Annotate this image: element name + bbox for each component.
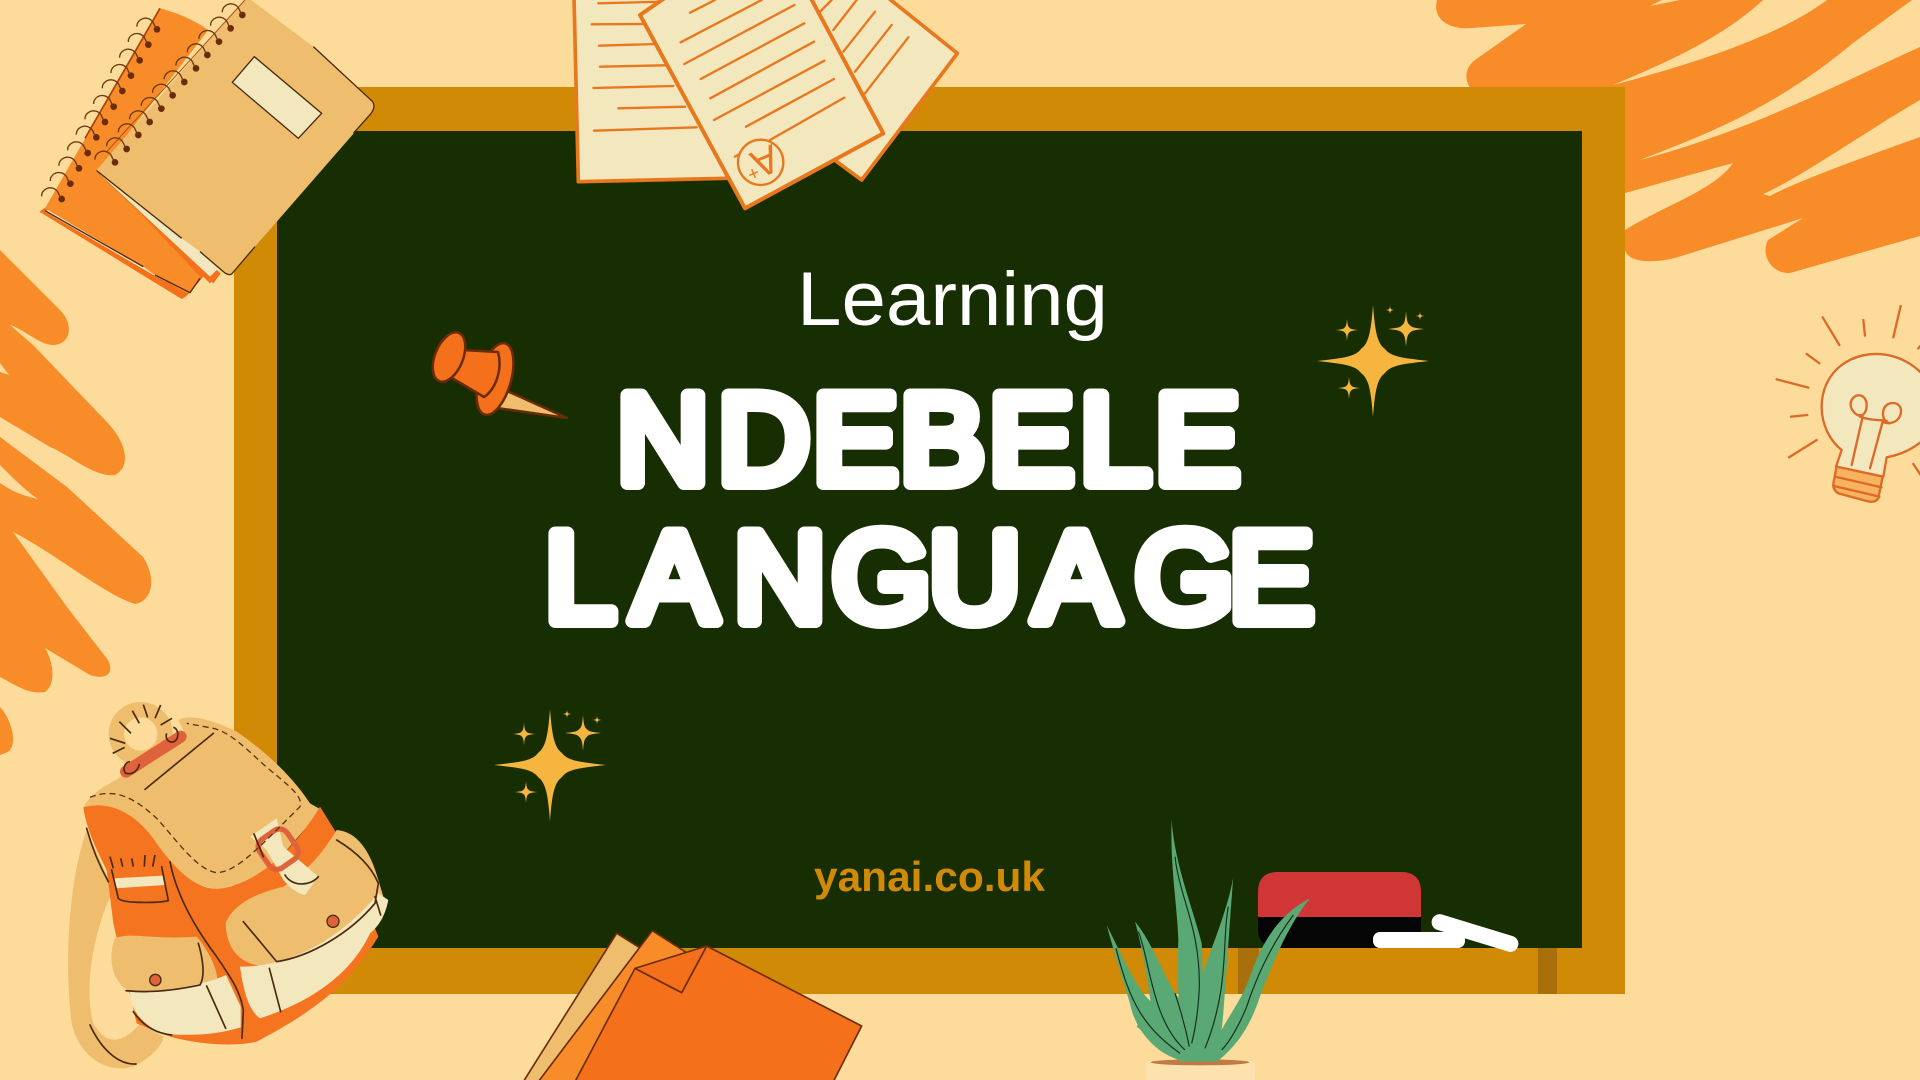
soil: [1151, 1059, 1249, 1065]
title line 1: NDEBELE: [617, 368, 1240, 510]
leaves: [1107, 818, 1310, 1062]
rays: [1777, 306, 1920, 480]
screw base: [1833, 467, 1883, 502]
studs: [150, 915, 339, 986]
subtitle: Learning: [797, 257, 1108, 342]
frame ledge shadows: [1238, 948, 1557, 994]
back notebook rings: [42, 18, 160, 202]
chalkboard surface: [277, 131, 1582, 948]
icon: spiral notebooks: [39, 0, 374, 299]
front notebook cover: [97, 0, 374, 275]
shoulder strap: [68, 830, 163, 1068]
pocket ticks: [110, 855, 155, 868]
buckle: [255, 825, 302, 873]
handle strap: [124, 727, 181, 774]
left pocket lower: [130, 975, 241, 1035]
side pouch stripe: [113, 876, 165, 888]
icon: lightbulb: [1777, 306, 1920, 502]
scribble: top right: [1436, 0, 1920, 273]
handle ring: [110, 705, 172, 758]
icon: chalk sticks: [1373, 912, 1520, 954]
bulb: [1822, 354, 1920, 477]
bag flap: [83, 717, 322, 890]
center paper: A: [744, 136, 786, 187]
icon: backpack: [68, 705, 388, 1068]
icon: push pin: [426, 328, 567, 419]
stitching: [90, 723, 301, 873]
notebook label: [232, 57, 322, 138]
icon: sparkles right: [1317, 305, 1429, 417]
right pocket lower: [240, 893, 388, 1018]
filament: [1851, 395, 1901, 468]
seam lines: [87, 733, 381, 1064]
center paper: [640, 0, 883, 208]
left pocket: [111, 936, 217, 993]
icon: potted plant: [1107, 818, 1310, 1080]
back notebook: [39, 8, 221, 299]
icon: orange paper stack: [523, 931, 862, 1080]
buckle strap: [250, 818, 318, 895]
bag body: [83, 805, 378, 1044]
icon: graded papers: [574, 0, 957, 208]
title line 2: LANGUAGE: [545, 506, 1314, 648]
pot: [1146, 1062, 1255, 1080]
icon: sparkles left: [494, 709, 606, 821]
scribble: left: [0, 250, 151, 755]
front notebook outline: [97, 47, 374, 275]
right pocket: [226, 830, 383, 966]
left paper: [574, 0, 727, 182]
right paper: [810, 0, 957, 180]
website: yanai.co.uk: [814, 853, 1046, 900]
icon: eraser: [1258, 872, 1421, 948]
leaf veins: [1116, 857, 1293, 1053]
chalkboard frame: [234, 87, 1625, 994]
front notebook rings: [95, 0, 246, 166]
center paper: +: [744, 161, 762, 185]
